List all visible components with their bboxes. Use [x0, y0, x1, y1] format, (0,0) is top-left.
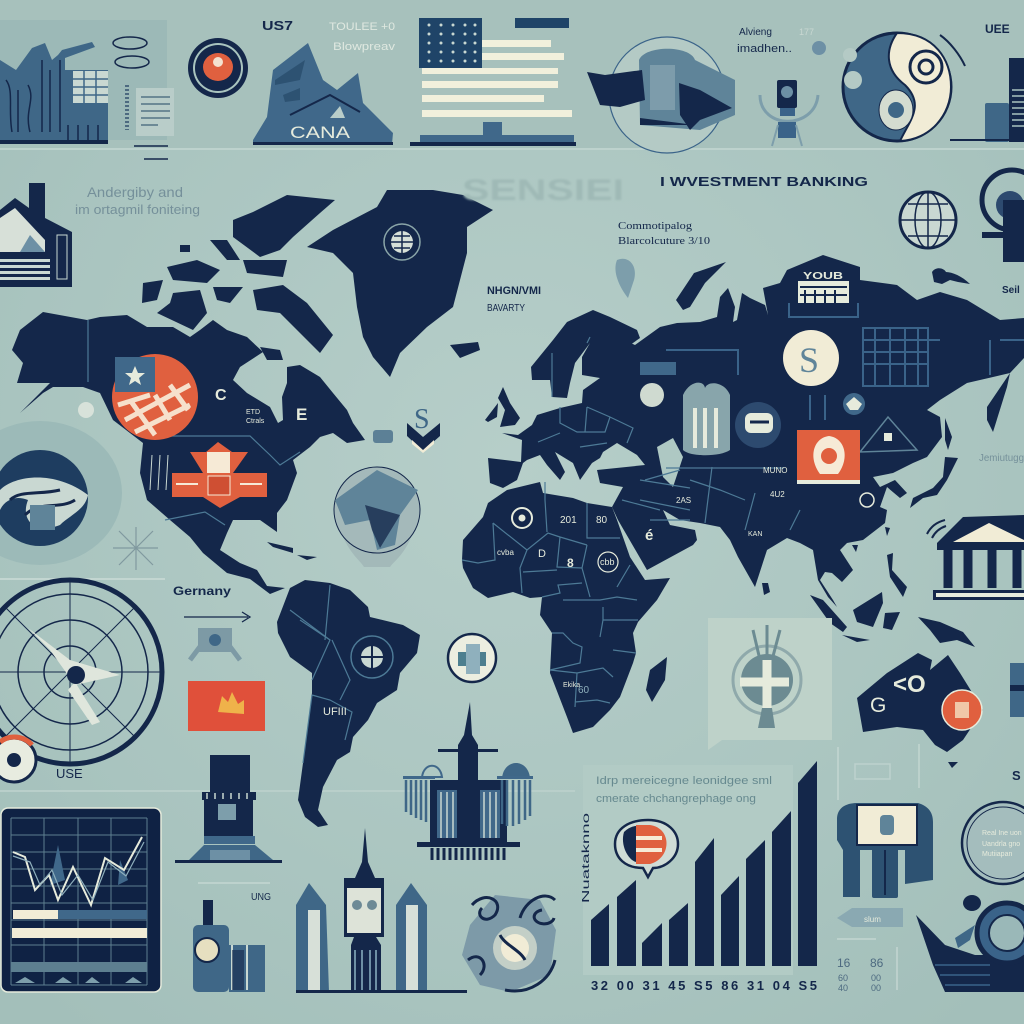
- Eurasia: [488, 255, 1024, 607]
- mountain Canada emblem: CANA: [290, 123, 351, 142]
- globe icon right: [900, 192, 956, 248]
- decorative panel outlines: [837, 744, 919, 990]
- bar chart: [591, 761, 817, 966]
- small map labels in Asia: MUNO: [763, 466, 787, 475]
- Sri Lanka, Taiwan, Hainan: [762, 527, 890, 595]
- labels in South America and Africa: UFIII: [323, 706, 347, 718]
- Canadian arctic islands: [142, 195, 335, 360]
- text block: NHGN: NHGN/VMI: [487, 285, 541, 297]
- Asia emblems: S: [799, 340, 819, 380]
- middle text block: Commotipalog: [618, 221, 692, 232]
- top left panel backdrop: [0, 20, 167, 140]
- globe cluster with machine: [587, 37, 735, 153]
- speech bubble icon: [615, 820, 678, 877]
- plant cross emblem: [708, 618, 832, 750]
- Iceland: [450, 342, 480, 358]
- Asia emblems: [640, 328, 928, 455]
- radar dial: [0, 579, 163, 765]
- city skyline with clock tower: [296, 828, 467, 993]
- faint watermark heading: SENSIEI: [462, 174, 624, 207]
- left text block: Andergiby and: [87, 184, 183, 200]
- label Germany: Gernany: [173, 584, 231, 598]
- vertical axis label: Nuataknno: [581, 812, 592, 903]
- labels in South America and Africa: cvba: [497, 548, 514, 557]
- small numbers: 40: [838, 983, 848, 993]
- monument capitol: [403, 702, 533, 860]
- red square emblem: [797, 430, 860, 484]
- labels in South America and Africa: Ekika: [563, 682, 580, 689]
- right side label: Jemiutugg: [979, 453, 1024, 464]
- swirl emblem: [462, 895, 556, 992]
- labels in South America and Africa: [323, 496, 691, 718]
- label S: S: [1012, 768, 1021, 783]
- Caspian sea: [657, 438, 683, 487]
- labels in South America and Africa: D: [538, 548, 546, 560]
- left text block: im ortagmil foniteing: [75, 202, 200, 217]
- label USE: USE: [56, 766, 83, 781]
- small numbers: 86: [870, 956, 884, 970]
- Greenland: [307, 190, 493, 377]
- mountain Canada emblem: [253, 43, 393, 145]
- small numbers: 00: [871, 973, 881, 983]
- small map labels in Asia: KAN: [748, 531, 762, 538]
- bottom right lens machine: [916, 895, 1024, 992]
- leaf icon: [615, 259, 635, 298]
- ring with text: [962, 802, 1024, 884]
- label US7: US7: [262, 18, 293, 33]
- icon: globe mid: [334, 467, 420, 567]
- starburst icon: [113, 527, 158, 570]
- arrow: [184, 612, 250, 622]
- right edge machine: [1010, 663, 1024, 717]
- map labels on North America: [150, 387, 307, 490]
- coin in South America: [351, 636, 393, 678]
- labels in South America and Africa: 201: [560, 515, 577, 526]
- country borders: [88, 320, 800, 763]
- labels in South America and Africa: 60: [578, 685, 590, 696]
- maple banner on USA: [172, 442, 267, 508]
- robot figure: [837, 803, 933, 898]
- Australia: [857, 653, 983, 752]
- icon: globe on greenland: [384, 224, 420, 260]
- Tasmania: [948, 762, 958, 768]
- heading: investment banking: I WVESTMENT BANKING: [660, 174, 868, 189]
- left text block: [75, 184, 200, 217]
- text block: NHGN: BAVARTY: [487, 303, 525, 314]
- small ring icon: [0, 737, 36, 782]
- small dot: [812, 41, 826, 55]
- small subheading top: Blowpreav: [333, 41, 396, 53]
- flag shield on Canada: [112, 354, 198, 440]
- robot icon faint: [190, 628, 240, 660]
- text block: chart title: Idrp mereicegne leonidgee sml: [596, 775, 772, 787]
- Southeast Asia islands: [810, 553, 975, 647]
- small pin icon: [78, 402, 94, 418]
- Africa emblems: 8: [567, 556, 574, 570]
- small badge: [373, 430, 393, 443]
- teal coin: [448, 634, 496, 682]
- North America: [12, 312, 365, 594]
- icon: Asia building sign: [798, 271, 849, 303]
- label 177: 177: [799, 27, 814, 37]
- lighthouse machine: [175, 755, 282, 863]
- small dark cluster icon near Seil: [932, 268, 970, 284]
- small numbers: 00: [871, 983, 881, 993]
- top left skyline: [0, 42, 108, 144]
- labels in South America and Africa: é: [645, 527, 653, 544]
- Kamchatka island: [987, 373, 1010, 432]
- Australia labels and emblem: <O: [893, 671, 926, 698]
- South America: [277, 580, 420, 827]
- Caribbean: [267, 542, 317, 560]
- Japan and Sakhalin: [910, 418, 958, 508]
- map labels on North America: E: [296, 405, 307, 424]
- world map: [12, 190, 1024, 827]
- shield S icon: S: [414, 404, 430, 435]
- text block: chart title: cmerate chchangrephage ong: [596, 793, 756, 805]
- small map labels in Asia: 4U2: [770, 490, 785, 499]
- map labels on North America: Ctrals: [246, 418, 265, 425]
- yin yang globe: [843, 33, 965, 141]
- labels in South America and Africa: 80: [596, 515, 608, 526]
- map labels on North America: ETD: [246, 409, 260, 416]
- ring with text: Uandrla gno: [982, 841, 1020, 848]
- gear icon far right: [982, 170, 1024, 262]
- Madagascar: [646, 657, 667, 702]
- Africa: [462, 482, 670, 733]
- American flag: [410, 18, 576, 146]
- middle text block: [618, 221, 710, 247]
- arrow band: [837, 908, 903, 927]
- small text top right second line: imadhen..: [737, 43, 792, 55]
- Australia labels and emblem: [870, 671, 982, 730]
- middle text block: Blarcolcuture 3/10: [618, 236, 710, 247]
- label UEE: UEE: [985, 22, 1010, 36]
- label SEIL: Seil: [1002, 285, 1020, 296]
- ring with text: Mutiiapan: [982, 851, 1012, 858]
- label UNG: UNG: [251, 892, 271, 903]
- icon: Asia building sign: YOUB: [803, 271, 843, 282]
- icon: robot lens: [760, 80, 818, 146]
- camera machine: [193, 882, 270, 992]
- map labels on North America: C: [215, 387, 227, 404]
- Africa emblems: [512, 508, 618, 572]
- small numbers: [837, 956, 884, 993]
- columned bank building: [927, 515, 1024, 600]
- document icon: [113, 37, 174, 159]
- small numbers: 16: [837, 956, 851, 970]
- small map labels in Asia: [748, 466, 874, 538]
- small heading top: TOULEE +0: [329, 21, 395, 33]
- Britain and Ireland: [485, 387, 520, 427]
- Africa emblems: cbb: [600, 557, 615, 567]
- icon: red medallion: [188, 38, 248, 98]
- text block: chart title: [596, 775, 772, 805]
- ring with text: Real Ine uon: [982, 830, 1022, 837]
- arrow band: slum: [864, 915, 881, 924]
- shield S icon: [407, 404, 440, 453]
- line chart panel: [1, 808, 161, 992]
- top right building: [950, 58, 1024, 142]
- house icon: [0, 183, 72, 287]
- red flag: [188, 681, 265, 731]
- small numbers: 60: [838, 973, 848, 983]
- globe storm icon left: [0, 421, 122, 565]
- Novaya Zemlya: [676, 262, 726, 310]
- small text top right: Alvieng: [739, 26, 772, 38]
- Australia labels and emblem: G: [870, 694, 886, 717]
- text block: NHGN: [487, 285, 541, 314]
- bar chart axis labels: 32 00 31 45 S5 86 31 04 S5: [591, 978, 817, 993]
- labels in South America and Africa: 2AS: [676, 496, 691, 505]
